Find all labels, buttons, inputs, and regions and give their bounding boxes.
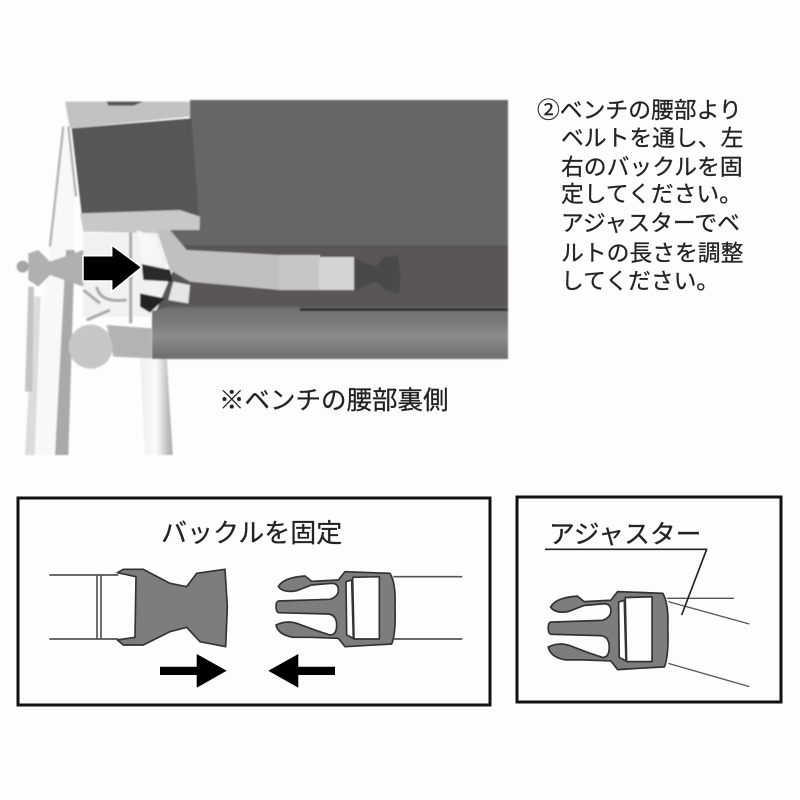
arrow: push left — [268, 654, 335, 688]
top strap — [65, 102, 190, 128]
tube end cap — [69, 325, 113, 369]
adjuster buckle — [548, 592, 668, 670]
top gap — [107, 102, 143, 106]
arrow on photo — [83, 245, 142, 292]
photo detail, left side — [17, 102, 280, 455]
fabric under belt — [157, 245, 280, 310]
upper seat fabric — [190, 100, 508, 246]
panel: fastening the buckle — [18, 498, 490, 705]
dark fabric, left section — [72, 118, 200, 230]
frame tube, rear — [140, 357, 173, 455]
bolt head — [17, 261, 29, 273]
frame joint area — [83, 233, 167, 317]
strap lines — [667, 598, 749, 687]
female buckle — [276, 572, 395, 647]
photo caption: ※ベンチの腰部裏側 — [219, 387, 449, 415]
side bracket — [25, 287, 34, 392]
right strap — [393, 577, 462, 639]
instructions text: 右のバックルを固 — [561, 154, 743, 180]
photo: bench waist underside — [17, 100, 508, 455]
adjuster diagram — [545, 549, 749, 687]
lower seat fabric — [190, 245, 508, 313]
fabric beside strap — [170, 230, 200, 247]
panel frame — [18, 498, 490, 705]
instructions text: ベルトを通し、左 — [561, 125, 743, 151]
panel heading: バックルを固定 — [161, 518, 342, 548]
instructions text — [537, 97, 744, 294]
buckle slit — [346, 580, 353, 638]
instructions text: ルトの長さを調整 — [561, 240, 744, 266]
lower strap — [80, 210, 200, 234]
pivot knob — [28, 250, 83, 287]
belt, right section — [279, 255, 320, 290]
leader line — [545, 549, 707, 615]
buckle slit — [619, 600, 626, 661]
front tube highlight edge — [25, 297, 41, 455]
panel frame — [517, 497, 781, 702]
seat tube — [152, 307, 508, 359]
buckle window — [353, 577, 379, 639]
panel: adjuster — [517, 497, 781, 702]
buckle window — [625, 597, 652, 662]
dark gaps — [142, 264, 173, 282]
left strap — [49, 575, 118, 639]
seat shadow line — [300, 308, 508, 311]
joint metal streaks — [83, 230, 131, 323]
belt buckle on bench — [355, 256, 401, 294]
buckle body — [276, 572, 395, 647]
frame tube, front — [25, 127, 75, 455]
arrow: push right — [160, 654, 227, 688]
buckle body — [548, 592, 668, 670]
front tube shading — [55, 250, 75, 455]
instructions text: 定してください。 — [561, 181, 742, 207]
buckle diagram — [49, 569, 462, 647]
belt end — [319, 257, 354, 290]
white cloth — [137, 230, 163, 265]
male buckle — [117, 569, 227, 647]
tube end, light — [107, 325, 152, 358]
instructions text: ②ベンチの腰部より — [537, 97, 742, 123]
adjuster label: アジャスター — [549, 521, 701, 549]
belt, left section — [157, 230, 280, 290]
front tube upper edges — [50, 127, 76, 247]
instructions text: してください。 — [561, 268, 719, 294]
instructions text: アジャスターでベ — [561, 210, 740, 236]
